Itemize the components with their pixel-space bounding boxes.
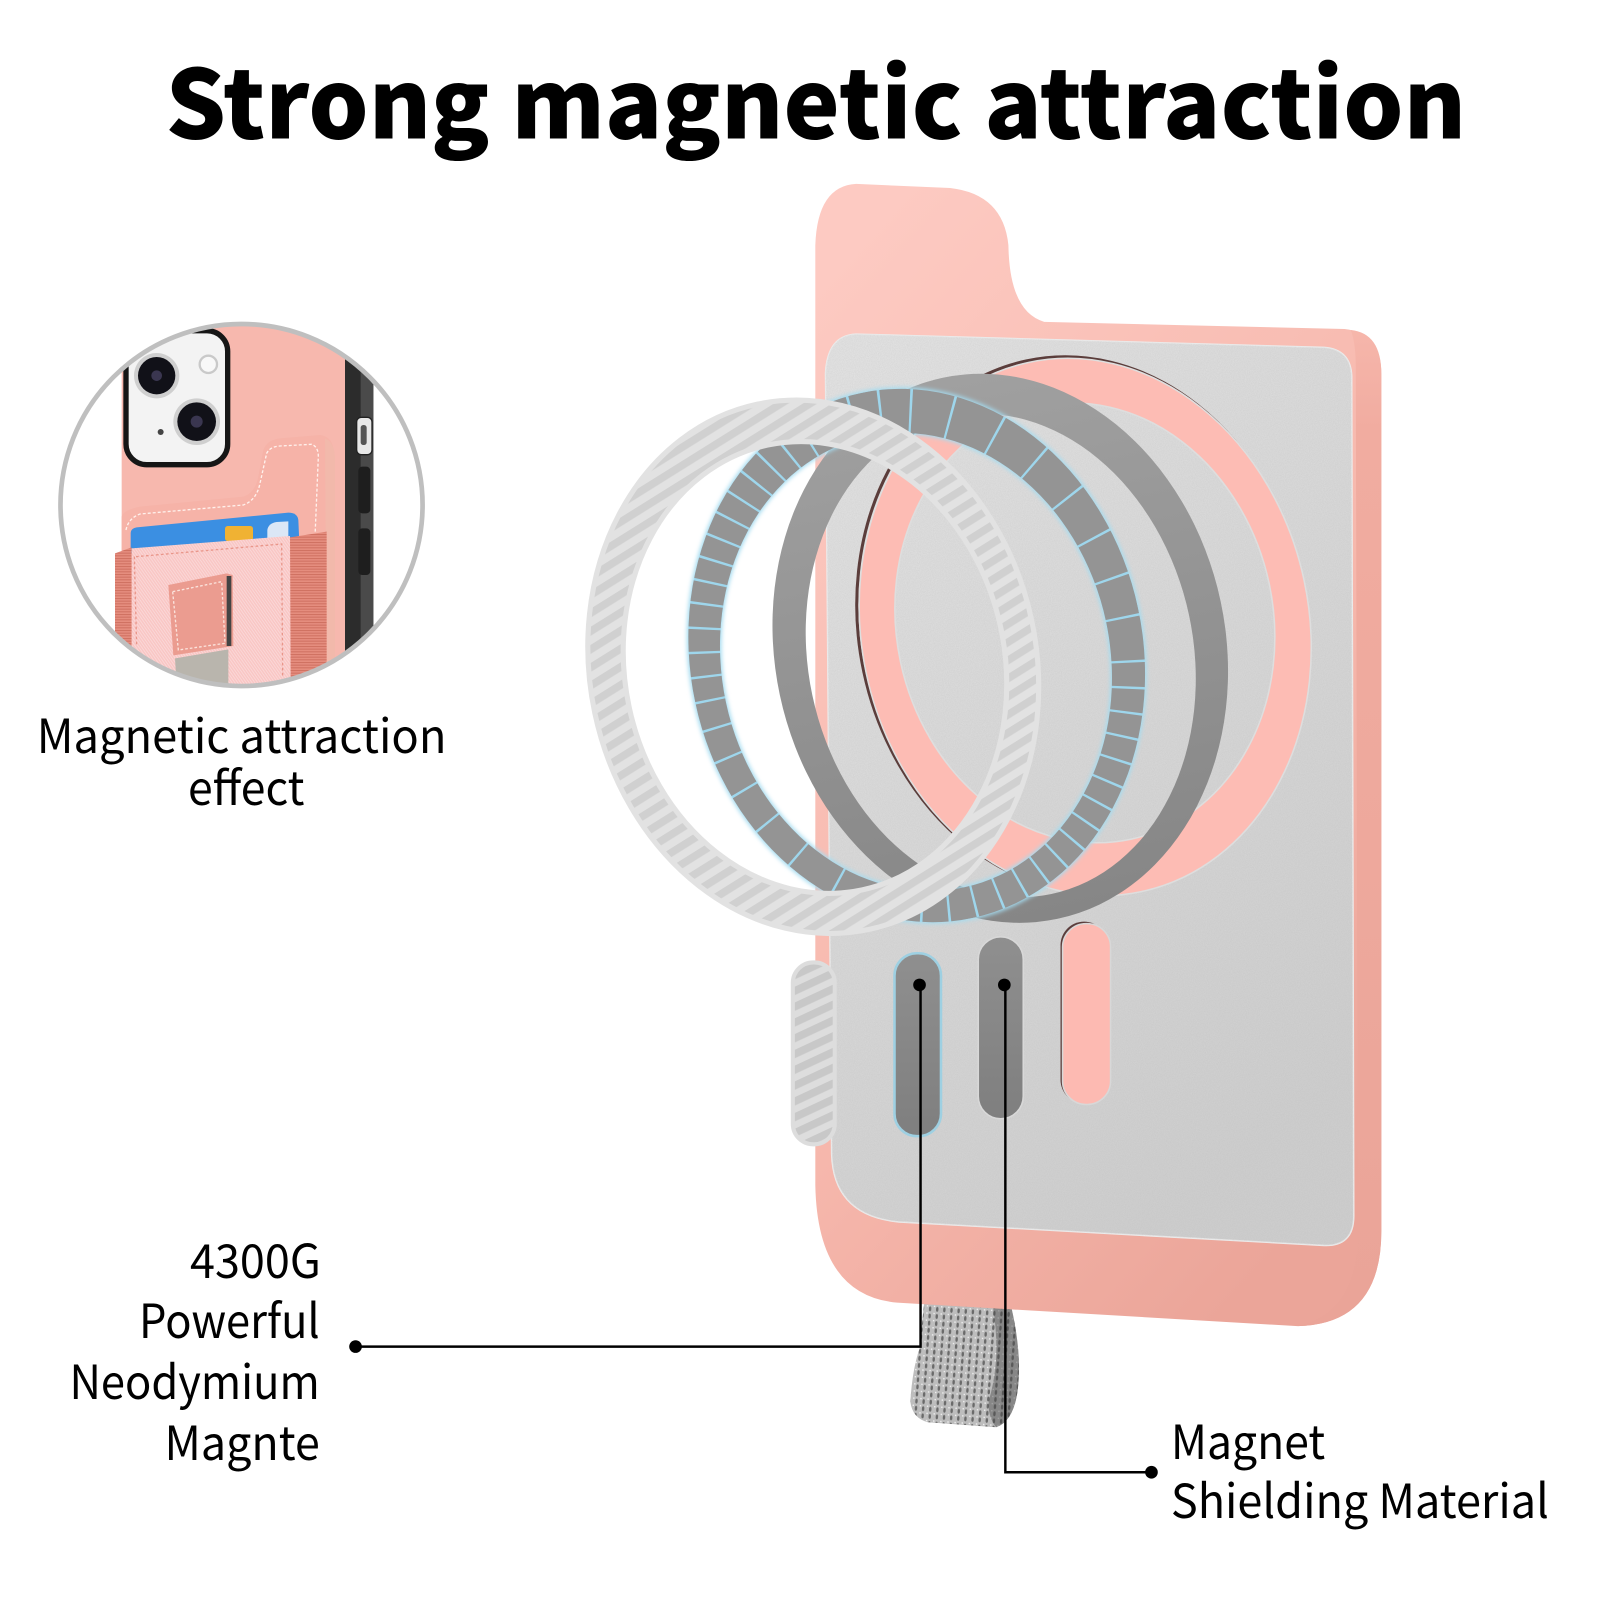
grey shielding ring [722,331,1278,966]
striped silver small tab [793,962,835,1144]
card right edge shading [1298,330,1381,1326]
grey strap loop [910,1298,1019,1427]
pink magnet recess ring [808,314,1360,939]
pink card body [815,184,1381,1326]
text: magnetic attraction effect: Magnetic attraction [37,698,446,767]
text: magnetic attraction effect: effect [188,750,305,819]
silver metal plate [826,334,1354,1245]
text: magnetic attraction effect [37,698,446,819]
text: magnet shielding material: Shielding Material [1171,1463,1549,1532]
text: 4300G powerful neodymium magnet: Neodymium [69,1344,320,1413]
title: Strong magnetic attraction [166,29,1466,166]
text: 4300G powerful neodymium magnet: 4300G [190,1223,321,1292]
panel: magnetic attraction inset [58,322,425,688]
panel: exploded wallet card [539,184,1381,1427]
striped silver front ring [539,358,1087,976]
inset photo of phone case [115,326,374,684]
text: 4300G powerful neodymium magnet [69,1223,321,1474]
exploded rings group [585,355,1312,936]
text: 4300G powerful neodymium magnet: Magnte [164,1405,320,1474]
magnet slot 1 [894,953,941,1136]
inset circle frame [60,324,423,686]
text: magnet shielding material: Magnet [1171,1404,1325,1473]
callout: shielding leader line [998,979,1158,1479]
text: magnet shielding material [1171,1404,1549,1532]
segmented neodymium magnet ring [684,385,1148,926]
pink slot 3 [1061,922,1111,1104]
text: 4300G powerful neodymium magnet: Powerful [139,1283,320,1352]
magnet slot 2 [978,937,1023,1119]
callout: magnet leader line [349,979,926,1353]
